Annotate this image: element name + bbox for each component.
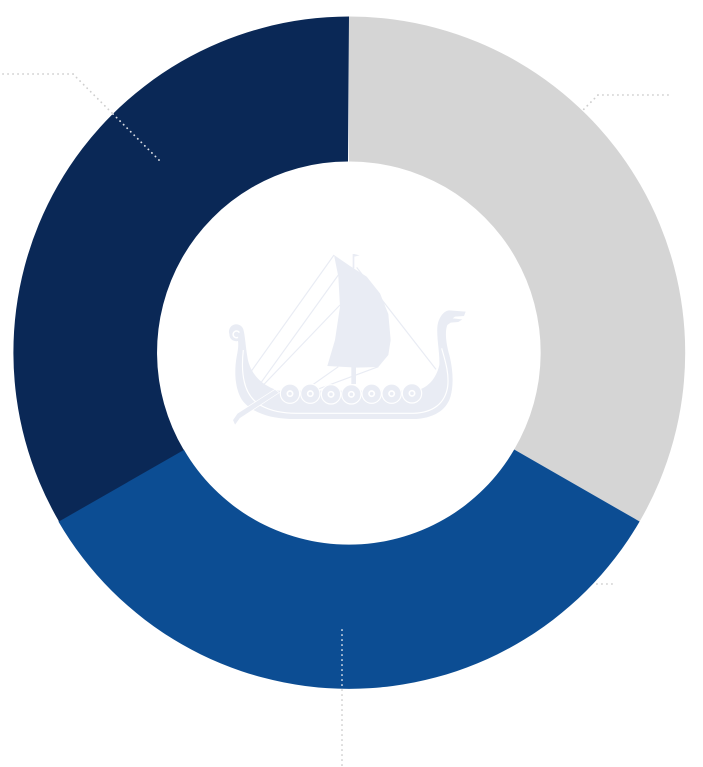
icon: Viking ship watermark xyxy=(229,254,466,425)
ship shields xyxy=(280,384,422,404)
ship oar xyxy=(233,389,279,425)
leader line: top left xyxy=(3,74,159,160)
donut segment: grey xyxy=(349,16,685,522)
ship hull xyxy=(229,310,466,419)
donut segment: navy xyxy=(13,16,349,522)
ship shield bosses xyxy=(287,391,415,397)
ship sail xyxy=(327,255,391,368)
leader line: lower right xyxy=(596,583,612,585)
ship mast xyxy=(351,254,360,384)
ship hull inlay line xyxy=(242,348,448,413)
leader line: bottom xyxy=(341,630,343,767)
ship rigging xyxy=(252,255,436,389)
donut segment: blue xyxy=(58,450,640,689)
leader line: top right xyxy=(583,95,668,110)
ship stern spiral xyxy=(233,331,239,338)
